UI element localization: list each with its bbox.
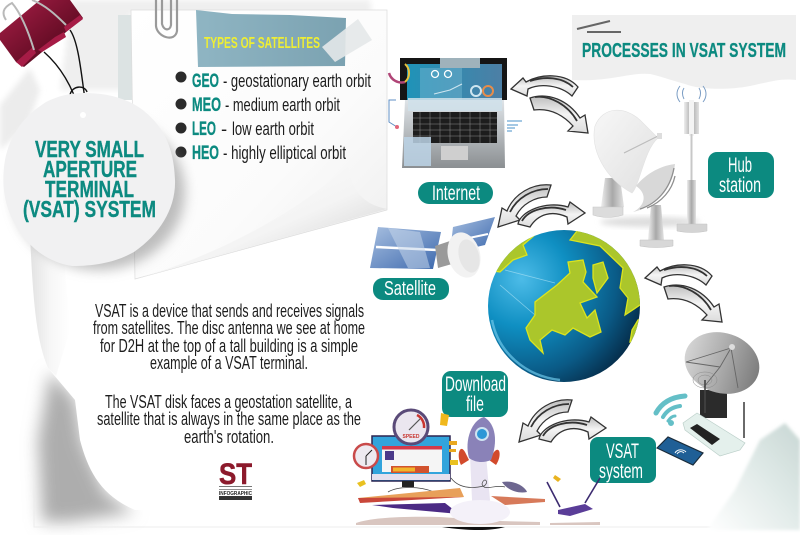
icon: binder clip (0, 0, 83, 67)
clock (354, 444, 378, 468)
curled page corner (135, 166, 387, 279)
arrow: earth to VSAT (645, 265, 722, 322)
bullet MEO row: - medium earth orbit (225, 94, 340, 115)
icon: laptop (389, 58, 522, 168)
title: TERMINAL (45, 176, 134, 202)
label: Download file: Download (445, 373, 506, 396)
logo: ST infographic: INFOGRAPHIC (219, 491, 252, 497)
bullet GEO row (176, 70, 371, 92)
title: (VSAT) SYSTEM (23, 196, 156, 222)
bullet GEO row: - geostationary earth orbit (223, 70, 371, 91)
text block: description: example of a VSAT terminal. (150, 353, 308, 373)
illustration: earth globe (486, 226, 650, 382)
label: Internet: Internet (432, 182, 480, 205)
heading panel: processes in VSAT system (572, 15, 796, 89)
list: satellite types (176, 70, 371, 164)
bullet MEO row: MEO (192, 95, 221, 116)
bullet GEO row: GEO (192, 71, 219, 92)
text block: description: The VSAT disk faces a geostation satellite, a (105, 392, 353, 412)
label: VSAT system: system (599, 460, 643, 483)
router (683, 413, 745, 456)
bullet HEO row (176, 142, 346, 164)
logo: ST infographic: ST (219, 458, 252, 491)
bullet HEO row: HEO (192, 143, 219, 164)
bullet LEO row: - (221, 118, 227, 139)
monitor (372, 436, 450, 481)
icon: tower (677, 86, 707, 232)
label: Hub station: station (719, 174, 761, 197)
bullet LEO row (176, 118, 314, 140)
arrow: VSAT to download (519, 400, 606, 442)
label: VSAT system (590, 437, 656, 483)
title: VERY SMALL (35, 136, 144, 162)
label: Hub station: Hub (728, 154, 752, 177)
icon: hanging cord (44, 30, 87, 112)
arrow: internet to earth (498, 185, 585, 227)
land masses (496, 231, 640, 355)
speed gauge (394, 410, 428, 444)
icon: hub station dishes (593, 86, 707, 248)
arrow: laptop to hub (511, 76, 588, 133)
title: APERTURE (43, 156, 137, 182)
bullet MEO row (176, 94, 340, 116)
cables and mouse (451, 478, 505, 488)
label: VSAT system: VSAT (606, 440, 639, 463)
yellow accents (440, 413, 449, 426)
desk (358, 488, 464, 502)
text block: description: satellite that is always in the same place as the (97, 409, 361, 429)
heading: types of satellites (196, 10, 372, 67)
label: Satellite: Satellite (384, 278, 436, 300)
label: Hub station (708, 152, 774, 198)
speed gauge: SPEED (403, 434, 420, 440)
bullet LEO row: LEO (192, 119, 216, 140)
bottom router (547, 478, 600, 516)
ground shadows (356, 517, 540, 525)
paper clip on card (156, 0, 177, 38)
text block: description: from satellites. The disc antenna we see at home (93, 318, 365, 338)
heading: types of satellites: TYPES OF SATELLITES (204, 35, 320, 52)
label: Download file: file (466, 393, 484, 416)
corner paper shape (707, 423, 800, 530)
panel: title tag (3, 93, 185, 270)
rocket (450, 417, 510, 524)
text block: description: for D2H at the top of a tall building is a simple (100, 336, 358, 356)
text block: description: earth's rotation. (184, 427, 274, 447)
text block: description (93, 301, 365, 447)
text block: description: VSAT is a device that sends and receives signals (95, 301, 364, 321)
dish (677, 323, 767, 418)
icon: satellite (370, 217, 495, 281)
illustration: download speed scene (354, 410, 600, 530)
title (23, 136, 156, 222)
bullet HEO row: - highly elliptical orbit (223, 142, 346, 163)
phone (657, 437, 703, 465)
wifi icon (656, 396, 685, 424)
label: Download file (442, 371, 508, 417)
bullet LEO row: low earth orbit (232, 118, 314, 139)
panel: types of satellites note card (131, 0, 387, 279)
icon: VSAT dish and router (656, 323, 767, 465)
